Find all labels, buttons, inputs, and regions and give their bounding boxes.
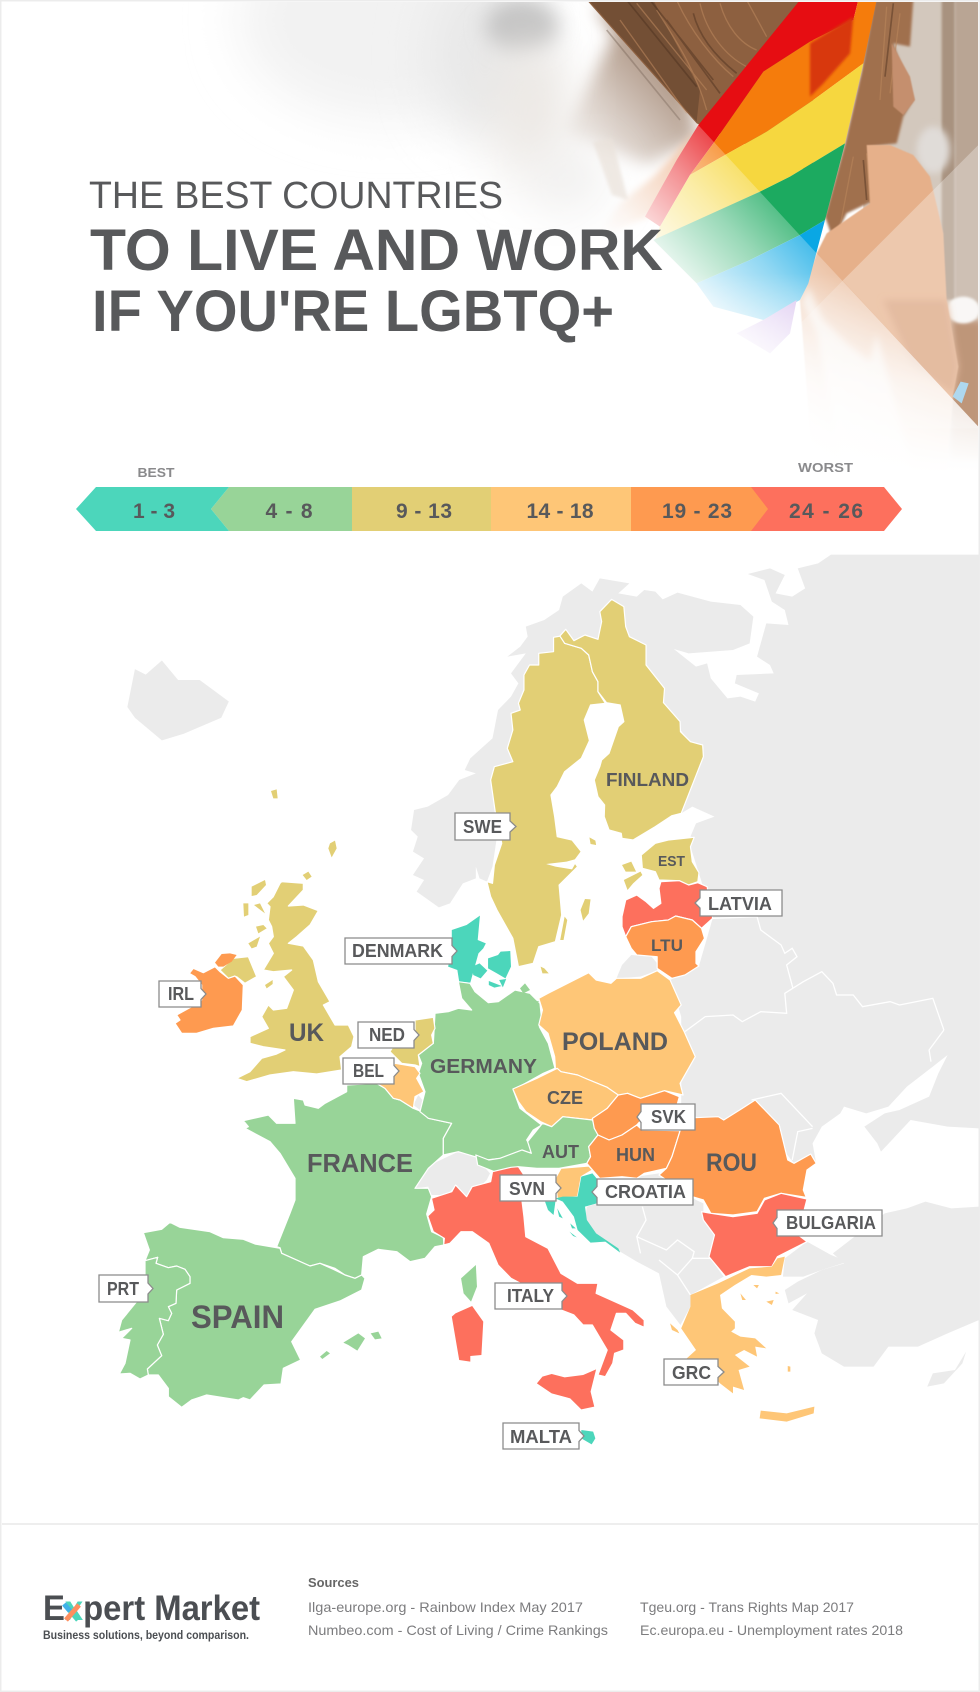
callout: Sweden	[455, 813, 516, 840]
country: Spain	[143, 1222, 382, 1407]
callout: Sweden: SWE	[463, 817, 502, 837]
legend bar: 14 - 18	[526, 500, 594, 523]
peach tint beside flag	[614, 134, 692, 224]
callout: Bulgaria: BULGARIA	[786, 1213, 876, 1233]
map label: Germany: GERMANY	[430, 1055, 537, 1078]
callout: Denmark: DENMARK	[352, 941, 443, 961]
callout: Malta: MALTA	[510, 1427, 572, 1447]
map: ranked countries, western group	[175, 789, 555, 1278]
hair	[562, 0, 913, 240]
logo: Expert Market: Business solutions, beyond comparison.	[43, 1628, 249, 1642]
sources: Numbeo.com - Cost of Living / Crime Rankings	[308, 1622, 608, 1638]
map: ranked countries, north-east group	[448, 599, 713, 988]
country: Hungary	[587, 1125, 680, 1178]
map label: Czech Republic: CZE	[547, 1088, 583, 1108]
bottom fade	[726, 282, 978, 484]
callout: Greece	[664, 1359, 724, 1385]
country: UK	[220, 789, 354, 1082]
title: TO LIVE AND WORK	[90, 218, 663, 283]
white diagonal wash	[560, 2, 978, 450]
map label: Poland: POLAND	[562, 1028, 668, 1056]
callout: Croatia	[592, 1179, 693, 1205]
callout: Netherlands: NED	[369, 1025, 405, 1045]
sources: Ilga-europe.org - Rainbow Index May 2017	[308, 1599, 583, 1615]
legend bar: 9 - 13	[396, 500, 452, 523]
callout: Slovakia: SVK	[651, 1107, 686, 1127]
title	[89, 175, 663, 344]
country: Romania	[659, 1100, 816, 1215]
country: Portugal	[118, 1257, 190, 1379]
callout: Latvia	[695, 890, 782, 916]
callout: Slovenia: SVN	[509, 1179, 545, 1199]
country: Germany	[418, 982, 555, 1160]
country: France	[243, 1083, 452, 1278]
skin: ear, shoulder, back	[800, 43, 958, 473]
callout: Denmark	[345, 938, 457, 964]
map label: Hungary: HUN	[616, 1145, 655, 1165]
logo: Expert Market: Expert Market	[43, 1589, 260, 1628]
white top straps	[801, 288, 885, 381]
country: Italy	[428, 1167, 644, 1409]
country: Ireland	[175, 953, 243, 1033]
callout: Italy	[495, 1283, 567, 1309]
callout: Croatia: CROATIA	[605, 1182, 686, 1202]
country: Lithuania	[626, 916, 705, 978]
callout: Slovakia	[637, 1104, 695, 1130]
country: Denmark	[448, 916, 511, 988]
callout: Ireland: IRL	[168, 984, 194, 1004]
legend bar: 19 - 23	[662, 500, 732, 523]
country: Sweden	[487, 636, 605, 973]
sources: Tgeu.org - Trans Rights Map 2017	[640, 1599, 854, 1615]
sources	[308, 1575, 903, 1638]
title: THE BEST COUNTRIES	[89, 175, 503, 217]
callout: Belgium	[343, 1058, 399, 1084]
country: Czech Republic	[513, 1068, 618, 1127]
callout: Netherlands	[358, 1022, 419, 1048]
callout: Malta	[503, 1423, 584, 1449]
callout: Portugal: PRT	[107, 1279, 139, 1299]
country: Greece	[670, 1257, 814, 1422]
country: Austria	[476, 1117, 598, 1172]
legend bar: 24 - 26	[789, 500, 863, 523]
sources: Sources	[308, 1575, 359, 1590]
map: ranked countries, iberian group	[118, 1222, 382, 1407]
country: Belgium	[377, 1063, 424, 1108]
map label: France: FRANCE	[307, 1148, 413, 1178]
country: Netherlands	[390, 1017, 435, 1067]
title: IF YOU'RE LGBTQ+	[92, 279, 614, 344]
callout: Belgium: BEL	[353, 1061, 384, 1081]
callout: Greece: GRC	[672, 1363, 711, 1383]
country: Croatia	[545, 1173, 620, 1253]
callout: Italy: ITALY	[507, 1286, 554, 1306]
map label: Lithuania: LTU	[651, 936, 683, 955]
map label: Romania: ROU	[706, 1149, 757, 1177]
callout: Bulgaria	[773, 1210, 882, 1236]
map label: Spain: SPAIN	[191, 1299, 284, 1335]
country: Slovenia	[555, 1166, 592, 1198]
map label: Austria: AUT	[542, 1142, 579, 1162]
hero photo: woman with rainbow flag	[252, 2, 978, 528]
country: Estonia	[622, 837, 699, 890]
legend bar: 1 - 3	[133, 500, 175, 523]
map label: Finland: FINLAND	[606, 769, 689, 790]
map label: UK: UK	[289, 1019, 324, 1047]
soft grey background left of hair	[240, 0, 628, 210]
legend label: best: BEST	[138, 465, 175, 480]
photo background street	[863, 0, 980, 483]
callout: Portugal	[99, 1275, 153, 1302]
callout: Latvia: LATVIA	[708, 894, 772, 914]
right translucent triangle	[843, 143, 980, 428]
legend bar: 4 - 8	[266, 500, 313, 523]
legend label: worst: WORST	[798, 460, 853, 475]
country: Malta	[581, 1430, 595, 1444]
sources: Ec.europa.eu - Unemployment rates 2018	[640, 1622, 903, 1638]
callout: Ireland	[159, 981, 206, 1007]
country: Slovakia	[592, 1091, 679, 1140]
legend bar	[76, 487, 902, 531]
country: Latvia	[622, 881, 713, 937]
country: Finland	[560, 599, 703, 845]
map: non-ranked grey land	[127, 555, 979, 1387]
rainbow flag	[645, 0, 877, 353]
map label: Estonia: EST	[658, 853, 685, 870]
wristband	[953, 382, 969, 403]
country: Poland	[539, 971, 695, 1098]
country: Corsica	[461, 1265, 477, 1302]
map: ranked countries, central and southern group	[428, 971, 816, 1444]
country: Bulgaria	[702, 1193, 807, 1277]
callout: Slovenia	[500, 1175, 561, 1201]
